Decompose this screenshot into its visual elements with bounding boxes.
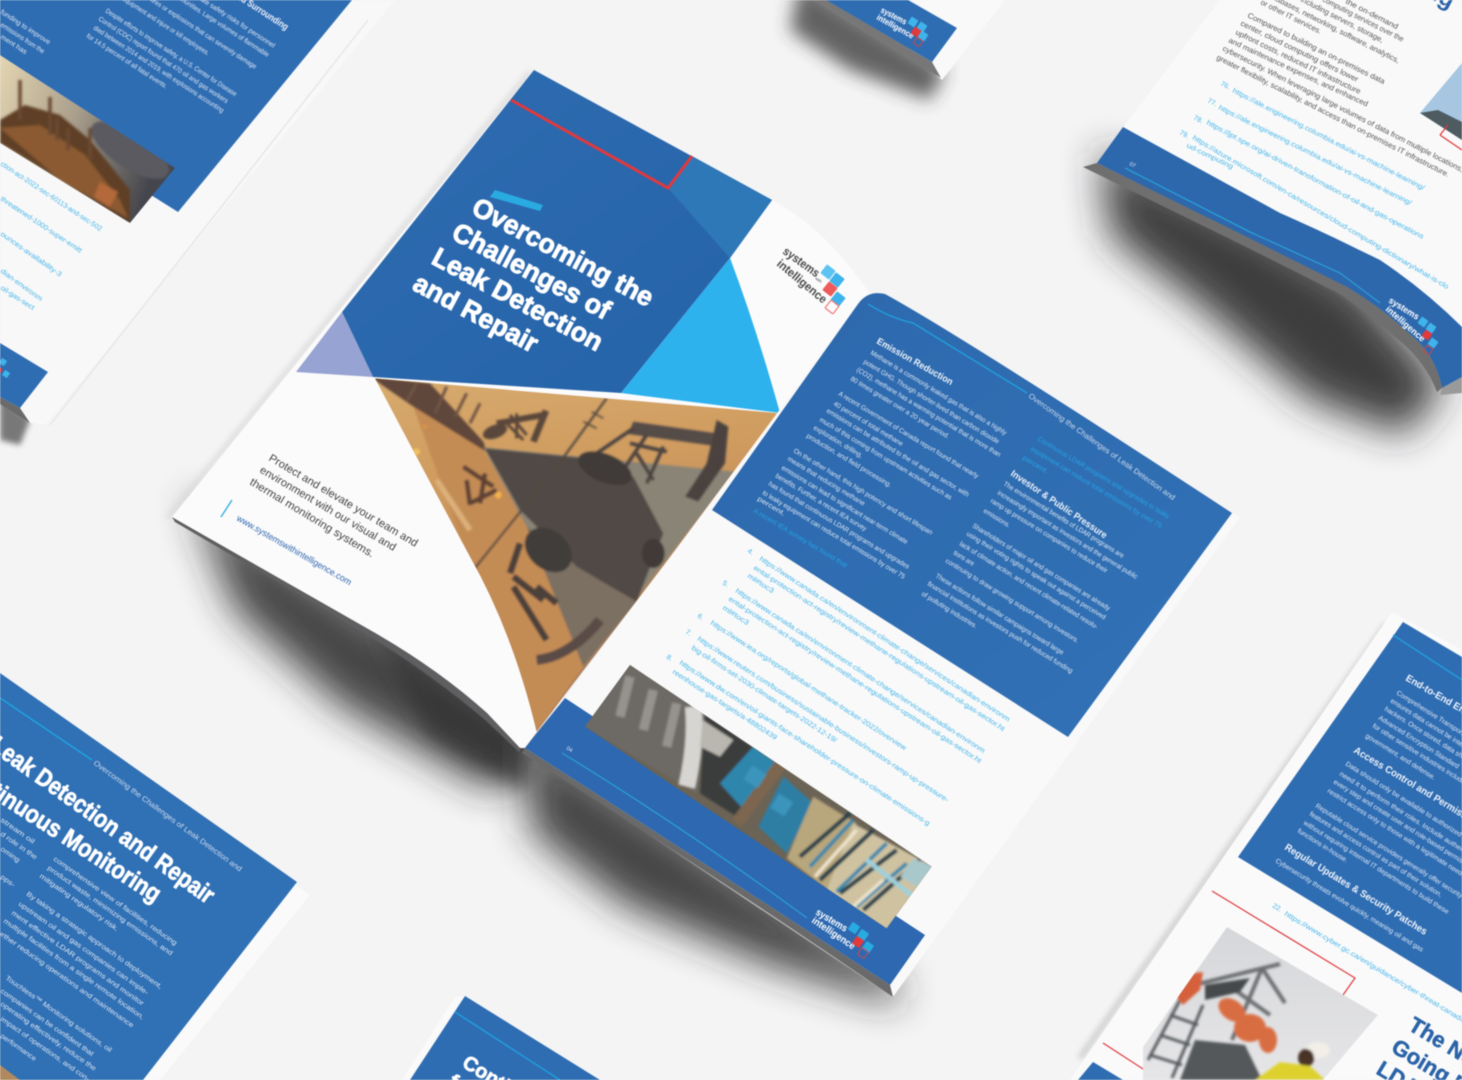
brochure: top centre footer (790, 0, 1005, 100)
reference links: ental-protection-act-registry/review-methane-regulations-upstream-oil-gas-sector.ht (752, 565, 1006, 733)
lighter corner shape (668, 156, 772, 258)
title fragment (1357, 1012, 1462, 1080)
logo (875, 5, 929, 47)
body copy: investor pressure: Shareholders of major oil and gas companies are already (971, 523, 1112, 613)
body copy: investor pressure: of polluting industries. (920, 591, 978, 630)
body copy: access control (1296, 761, 1462, 916)
blue text panel (712, 293, 1232, 737)
blue strip (826, 0, 957, 62)
running head: Overcoming the Challenges of Leak Detection and (92, 758, 244, 873)
body copy: emission reduction: potent GHG. Though shorter-lived than carbon dioxide (862, 359, 1000, 446)
heading: emission reduction: Emission Reduction (875, 336, 955, 388)
body copy: access control: Reputable cloud service providers generally offer security (1314, 803, 1462, 900)
reference links: threatened-1000-super-emitt (0, 196, 83, 255)
body copy: investor pressure: continuing to draw growing support among investors. (944, 558, 1080, 645)
panel: right page: 04 (565, 746, 573, 754)
body copy: investor pressure: The environmental benefits of LDAR programs are (1002, 481, 1125, 560)
reference links: ental-protection-act-registry/review-methane-regulations-upstream-oil-gas-sector.ht (727, 596, 982, 765)
page block edge (522, 748, 893, 997)
body copy: emission reduction: has found that continuous LDAR programs and upgrades (767, 481, 911, 571)
body copy: greater flexibility, scalability, and access than on-premises IT infrastructure. (1215, 53, 1451, 179)
reference links (0, 161, 103, 312)
main brochure spread (168, 70, 1240, 1005)
reference links: 79. (1178, 130, 1190, 140)
body copy: encryption (1364, 690, 1462, 789)
heading: regular updates: Regular Updates & Security Patches (1282, 842, 1429, 938)
body copy: emission reduction: (CO2), methane has a warming potential that is more than (855, 367, 1002, 459)
website: www.systemswithintelligence.com (234, 513, 353, 587)
running head: Overcoming the Challenges of Leak Detection and (1027, 391, 1177, 502)
header rule (0, 698, 92, 760)
brochure: bottom right spread (1070, 612, 1462, 1080)
body copy (0, 817, 178, 1080)
body copy: comprehensive view of facilities, reducing (52, 856, 178, 947)
blue panel (0, 673, 297, 1080)
blue panel (1238, 622, 1462, 993)
body copy: investor pressure (920, 481, 1139, 675)
cover white base (172, 70, 868, 748)
body copy: Despite efforts to improve safety, a U.S. Center for Disease (104, 8, 238, 98)
body copy (0, 0, 276, 115)
body copy: investor pressure: ramp up pressure on companies to reduce their (989, 498, 1109, 575)
header rule (455, 1012, 560, 1080)
body copy: investor pressure: financial institutions as investors push for reduced funding (926, 581, 1074, 675)
page and crease (0, 0, 395, 425)
footer rule and page number (562, 753, 807, 918)
reference links: dian-environm (0, 268, 44, 303)
photo: worker at pumpjack (1143, 927, 1378, 1080)
spine edge (817, 0, 941, 78)
reference links: https://jpt.spe.org/ai-driven-transformation-of-oil-and-gas-operations (1205, 120, 1425, 241)
reference links: https://ale.engineering.columbia.edu/ai-vs-machine-learning/ (1231, 88, 1426, 192)
panel: right page (522, 291, 1240, 997)
light blue triangle (621, 258, 780, 413)
logo: intelligence (1384, 304, 1427, 344)
photo: pumpjacks at sunset (374, 378, 778, 732)
body copy: encryption: government, and defense. (1364, 733, 1436, 782)
body copy: funding to improve (0, 9, 52, 46)
body copy: emission reduction: to leaky equipment can reduce total emissions by over 75 (761, 490, 906, 581)
body copy: emission reduction: means that reducing methane (786, 456, 866, 508)
reference link: https://www.cyber.gc.ca/en/guidance/cyber-threat-canada (1283, 911, 1462, 1024)
photo corner (0, 1065, 20, 1080)
body copy: access control: functions in-house. (1296, 828, 1349, 864)
panel: cover page (172, 70, 868, 750)
reference links: ml#toc3 (721, 605, 750, 627)
title: Leak Detection (427, 242, 608, 357)
page (1070, 612, 1462, 1080)
body copy: Touchless™ Monitoring solutions, oil (4, 975, 113, 1054)
logo: systems (879, 5, 909, 27)
reference links: ud-computing (1185, 142, 1234, 171)
body copy: mitigating regulatory risk. (38, 873, 120, 933)
white margin (0, 673, 310, 1080)
photo: rocks and sky (1420, 63, 1462, 140)
tagline: Protect and elevate your team and (266, 452, 420, 550)
body copy: access control: without requiring internal IT departments to build these (1301, 819, 1450, 916)
shadow (1100, 150, 1445, 435)
body copy: center, cloud computing offers lower (1239, 19, 1360, 84)
logo: systems (780, 244, 823, 280)
right page shadow (525, 730, 900, 1005)
cover blue hexagon (342, 70, 772, 393)
reference links: 5. (721, 580, 730, 589)
reference links: 76. (1219, 81, 1231, 91)
body copy (1215, 0, 1462, 179)
body copy: emission reduction: A recent IEA survey has found that (752, 508, 848, 569)
body copy: Control (CDC) report found that 470 oil and gas workers (97, 16, 229, 105)
body copy: emission reduction: much of this coming from upstream activities such as (818, 417, 953, 502)
logo: systems (1387, 295, 1421, 322)
body copy: emission reduction: percent. (756, 496, 786, 518)
lavender triangle (296, 312, 373, 377)
body copy: upstream oil and gas companies can imple- (17, 901, 149, 997)
body copy: product waste, minimizing emissions, and (46, 865, 174, 957)
body copy: upfront costs, reduced IT infrastructure (1234, 28, 1362, 96)
title: Challenges of (447, 217, 617, 326)
accent tick (221, 500, 232, 517)
shadow under page (0, 395, 30, 445)
logo: with (814, 276, 823, 284)
brochure: top right spread (1083, 0, 1462, 435)
body copy: multiple facilities from a single remote location, (2, 918, 145, 1021)
body copy: investor pressure: increasingly important as investors and the general public (996, 490, 1139, 581)
white margin (402, 996, 600, 1080)
photo: pipe and machinery (582, 662, 933, 930)
body copy: emission reduction (752, 350, 1008, 581)
body copy: Compared to building an on-premises data (1246, 11, 1387, 86)
reference links: https://www.dw.com/en/oil-giants-face-shareholder-pressure-on-climate-emissions-g (678, 660, 931, 827)
crease shading (1080, 624, 1387, 1058)
blue panel (0, 0, 352, 212)
cover page block (172, 517, 520, 753)
body copy: emission reduction: Methane is a commonly leaked gas that is also a highly (869, 350, 1008, 437)
body copy: emissions from the (0, 22, 46, 56)
logo (774, 244, 846, 314)
reference links: 4. (746, 548, 755, 557)
reference links: 77. (1206, 98, 1218, 108)
body copy: investor pressure: using their voting rights to speak out against a perceived (965, 531, 1107, 621)
body copy: ment effective LDAR programs and monitor (10, 910, 146, 1008)
body copy: for 14.5 percent of all fatal events. (85, 33, 168, 90)
body copy: emission reduction: production, and field processing. (805, 433, 893, 489)
pull quote: equipment can reduce total emissions by over 75 (1029, 446, 1163, 530)
reference links (1178, 81, 1450, 291)
body copy: emission reduction: 40 percent of total methane (832, 401, 904, 448)
reference link (1271, 903, 1462, 1024)
page (860, 0, 1005, 80)
reference links: https://www.canada.ca/en/environment-climate-change/services/canadian-environm (758, 556, 1011, 724)
body copy: emission reduction: On the other hand, this high potency and short lifespan (792, 448, 934, 537)
accent bar (490, 190, 543, 211)
footer strip with logo marks (0, 343, 48, 408)
reference links (665, 548, 1011, 827)
body copy: encryption: Advanced Encryption Standard (1377, 715, 1460, 770)
cover shadow: tight core near spine (370, 625, 525, 790)
brochure: bottom centre (402, 996, 600, 1080)
brochure: top right spread: 07 (1128, 161, 1136, 170)
reference links: ction-act-2022-sec-60113-and-sec-502 (0, 161, 103, 233)
reference links: https://ale.engineering.columbia.edu/ai-vs-machine-learning/ (1217, 105, 1413, 207)
header rule (868, 304, 1027, 393)
body copy: companies can be confident that (0, 988, 95, 1058)
logo: intelligence (809, 915, 857, 952)
title (408, 192, 659, 359)
body copy: emission reduction: exploration, drilling, (812, 425, 864, 460)
body copy: access control: features and access control as part of their solution, (1308, 811, 1443, 899)
reference links: https://azure.microsoft.com/en-ca/resources/cloud-computing-dictionary/what-is-clo (1191, 135, 1450, 291)
logo: intelligence (774, 257, 830, 306)
outer edge soft shadow (168, 72, 530, 518)
blue panel (410, 996, 600, 1080)
body copy: investor pressure: tions are (952, 550, 975, 568)
footer strip (1097, 127, 1462, 388)
body copy: emission reduction: emissions can be attributed to the oil and gas sector, with (825, 408, 970, 499)
reference links: 6. (696, 613, 705, 622)
heading: investor pressure: Investor & Public Pressure (1008, 468, 1109, 541)
reference link: 22. (1271, 903, 1283, 914)
brochure: top left spread (0, 0, 395, 445)
title: and Repair (408, 268, 544, 359)
tagline: environment with our visual and (257, 464, 398, 554)
tagline: thermal monitoring systems. (247, 476, 376, 560)
body copy: investor pressure: lack of climate action, and recent climate-related resolu- (958, 541, 1099, 631)
body copy: died between 2014 and 2019, with explosions accounting (92, 25, 225, 115)
pull quote: percent. (1021, 455, 1050, 476)
reference links: 8. (665, 654, 674, 663)
body copy: access control: restrict access only to those with a legitimate need. (1326, 788, 1462, 879)
photo: refinery at dusk (0, 55, 178, 223)
body copy: investor pressure: These actions follow similar campaigns toward large (934, 573, 1065, 657)
page block edge (1083, 163, 1442, 392)
body copy: emission reduction: A recent Government of Canada report found that nearly (837, 391, 980, 480)
body copy: operating effectively, reduce the (0, 1001, 97, 1073)
reference links: reenhouse-gas-targets/a-48802439 (671, 669, 778, 742)
footer rule and page number (1125, 168, 1380, 303)
reference links: ml#toc3 (746, 573, 775, 595)
pull quote: Continuous LDAR programs and upgrades to leaky (1036, 436, 1171, 521)
body copy: emission reduction: benefits. Further, a recent IEA survey (774, 473, 868, 533)
body copy: emission reduction: 80 times greater over a 20 year period. (849, 376, 950, 440)
cover shadow (190, 495, 540, 790)
reference links: 78. (1192, 115, 1204, 125)
footer corner (1078, 1062, 1123, 1080)
reference links: big-oil-firms-set-2030-climate-targets-2022-12-19/ (690, 645, 838, 744)
logo: systems (813, 907, 849, 935)
reference links: https://www.reuters.com/business/sustainable-business/investors-ramp-up-pressure- (696, 636, 950, 804)
logo (1384, 295, 1439, 355)
header rule (1393, 635, 1462, 680)
shadow (790, 0, 945, 100)
page (1123, 0, 1462, 330)
red frame (1440, 125, 1462, 150)
brochure: bottom left spread (0, 673, 310, 1080)
red frame (1103, 891, 1355, 1080)
body copy: updates: Cybersecurity threats evolve quickly, meaning oil and gas (1274, 858, 1425, 954)
reference links: ounces-availability-3 (0, 231, 63, 279)
body copy: and maintenance expenses, and enhanced (1227, 36, 1370, 108)
reference links: https://www.canada.ca/en/environment-climate-change/services/canadian-environm (734, 588, 986, 755)
body copy: emission reduction: emissions can lead to significant near-term climate (780, 465, 909, 546)
right page paper (525, 291, 1240, 997)
body copy: By taking a strategic approach to deployment, (25, 891, 163, 991)
logo: intelligence (875, 12, 916, 41)
reference links: https://www.iea.org/reports/global-methane-tracker-2022/overview (709, 620, 908, 753)
title: Overcoming the (467, 192, 659, 313)
body copy: impact of operations, and con- (0, 1016, 91, 1080)
body copy: investor pressure: emissions. (982, 508, 1011, 529)
footer strip (525, 698, 925, 985)
red frame (511, 100, 692, 188)
body copy: cybersecurity. When leveraging large volumes of data from multiple locations, (1221, 44, 1462, 174)
logo (809, 907, 874, 959)
reference links: 7. (684, 629, 693, 638)
